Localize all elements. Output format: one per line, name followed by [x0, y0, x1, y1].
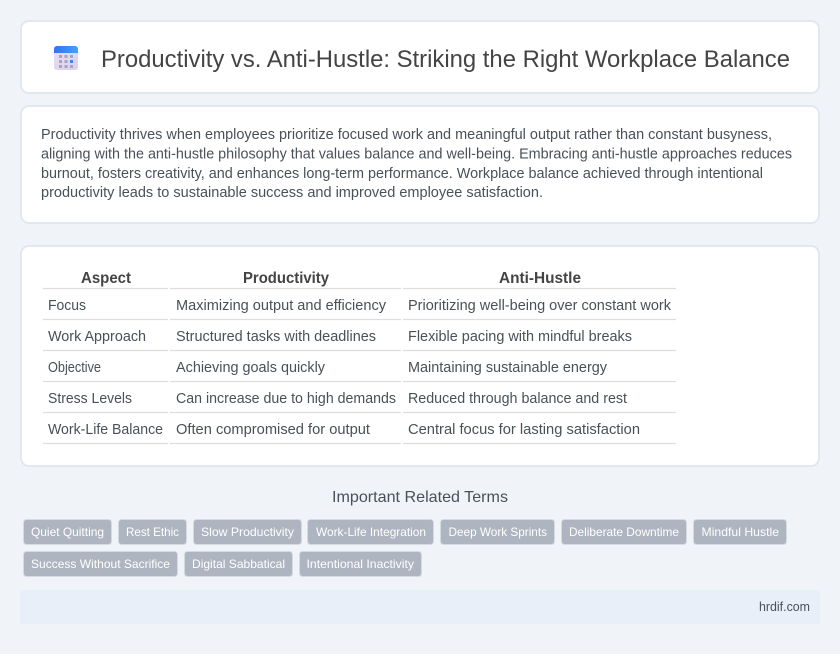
summary text: aligning with the anti-hustle philosophy that values balance and well-being. Embracing anti-hustle approaches reduces	[41, 146, 792, 162]
row: objective	[43, 360, 676, 382]
tag: intentional inactivity: Intentional Inactivity	[306, 557, 414, 571]
row: work approach: Work Approach	[48, 329, 146, 345]
tag: slow productivity	[194, 520, 302, 544]
footer	[20, 590, 820, 624]
row: focus: Focus	[48, 298, 86, 314]
tag: digital sabbatical: Digital Sabbatical	[192, 557, 285, 571]
row: objective: Maintaining sustainable energy	[408, 360, 608, 376]
summary text: productivity leads to sustainable success and improved employee satisfaction.	[41, 185, 543, 201]
row: work-life balance	[43, 422, 676, 444]
icon: calendar	[54, 46, 78, 70]
row: stress levels: Reduced through balance and rest	[408, 391, 627, 407]
tag: work-life integration: Work-Life Integration	[316, 525, 426, 539]
row: work approach: Flexible pacing with mindful breaks	[408, 329, 632, 345]
tag: digital sabbatical	[184, 552, 292, 576]
tag: success without sacrifice	[24, 552, 178, 576]
tag: work-life integration	[308, 520, 434, 544]
tag: rest ethic	[118, 520, 186, 544]
tag: quiet quitting	[24, 520, 112, 544]
summary text	[41, 127, 792, 201]
row: stress levels	[43, 391, 676, 412]
table header: Aspect	[81, 270, 132, 287]
panel: comparison table	[21, 246, 819, 466]
summary text: Productivity thrives when employees prioritize focused work and meaningful output rather than constant busyness,	[41, 127, 772, 143]
row: focus: Maximizing output and efficiency	[176, 298, 387, 314]
row: work approach	[43, 329, 676, 350]
row: objective: Achieving goals quickly	[176, 360, 326, 376]
row: focus	[43, 298, 676, 320]
tag: mindful hustle	[694, 520, 786, 544]
row: work-life balance: Often compromised for output	[176, 422, 370, 438]
tag: rest ethic: Rest Ethic	[126, 525, 179, 539]
tag: slow productivity: Slow Productivity	[201, 525, 294, 539]
row: work-life balance: Work-Life Balance	[48, 422, 163, 438]
tag: success without sacrifice: Success Without Sacrifice	[31, 557, 170, 571]
footer source: hrdif.com	[759, 599, 810, 614]
heading: related terms: Important Related Terms	[332, 489, 508, 506]
tag: quiet quitting: Quiet Quitting	[31, 525, 104, 539]
row: work approach: Structured tasks with deadlines	[176, 329, 376, 345]
title: Productivity vs. Anti-Hustle: Striking the Right Workplace Balance	[101, 46, 790, 73]
tag: deliberate downtime	[562, 520, 686, 544]
row: work-life balance: Central focus for lasting satisfaction	[408, 422, 640, 438]
summary text: burnout, fosters creativity, and enhances long-term performance. Workplace balance achieved through intentional	[41, 166, 763, 182]
tag: intentional inactivity	[300, 552, 422, 576]
panel: header	[21, 21, 819, 93]
tag: deep work sprints: Deep Work Sprints	[448, 525, 547, 539]
table header: Anti-Hustle	[499, 270, 581, 287]
row: focus: Prioritizing well-being over constant work	[408, 298, 672, 314]
tag: mindful hustle: Mindful Hustle	[702, 525, 779, 539]
tag group: related terms	[24, 520, 786, 576]
table header	[43, 270, 676, 288]
panel: summary	[21, 106, 819, 223]
row: stress levels: Can increase due to high demands	[176, 391, 396, 407]
table header: Productivity	[243, 270, 329, 287]
tag: deep work sprints	[440, 520, 554, 544]
tag: deliberate downtime: Deliberate Downtime	[569, 525, 679, 539]
row: objective: Objective	[48, 360, 101, 376]
row: stress levels: Stress Levels	[48, 391, 132, 407]
